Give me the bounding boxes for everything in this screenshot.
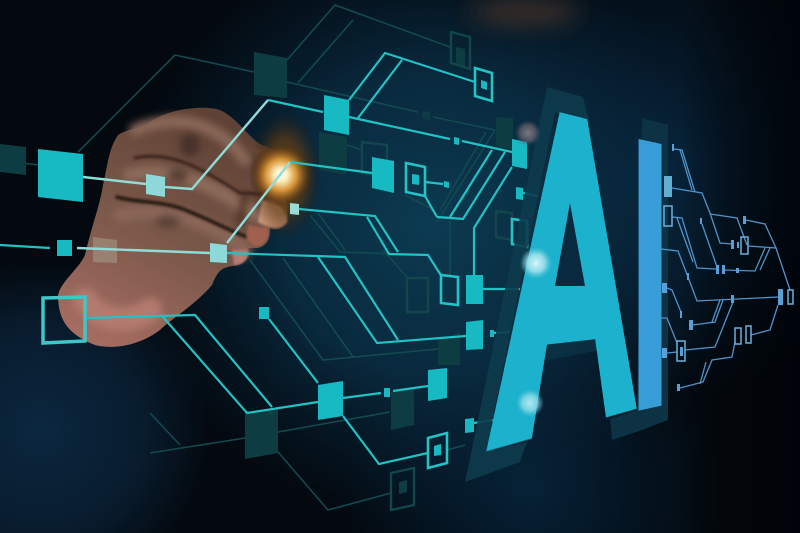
counter and crossbar of the letter A <box>538 160 604 345</box>
blue nodes <box>662 144 783 391</box>
ghost node on the palm <box>93 237 117 263</box>
bokeh: upper mauve <box>515 120 541 146</box>
bokeh group <box>515 120 552 417</box>
hand silhouette <box>58 108 288 347</box>
bright circuit traces <box>0 53 538 464</box>
hand <box>58 108 288 347</box>
finger shading <box>85 122 264 319</box>
glowing light at fingertip <box>249 111 321 239</box>
blue ring nodes <box>664 206 793 361</box>
shadow panels behind the AI letters <box>465 87 668 482</box>
bokeh: bright centre <box>520 247 552 279</box>
circuit nodes: filled squares <box>38 80 527 456</box>
circuit nodes: ring squares <box>43 68 527 468</box>
fingertips <box>232 148 287 265</box>
dim circuit nodes <box>0 47 513 494</box>
dim ring nodes <box>362 32 512 510</box>
blue circuit on the right of the letters <box>661 144 793 391</box>
pale nodes over the hand <box>146 174 299 263</box>
bokeh: lower <box>516 389 544 417</box>
dim background circuit traces <box>0 5 513 510</box>
pale traces crossing the hand <box>77 100 290 253</box>
